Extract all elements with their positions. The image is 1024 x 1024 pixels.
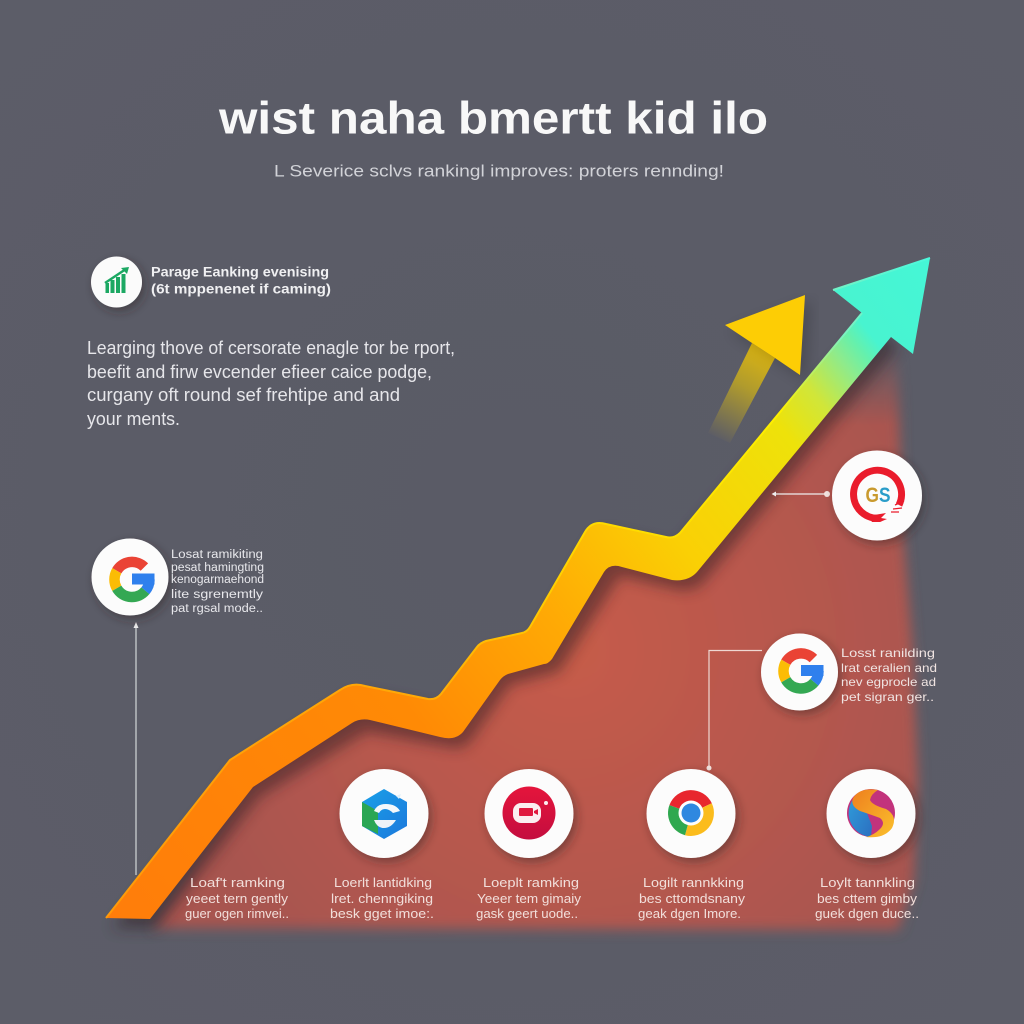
label: column three: Loeplt ramking [483, 875, 579, 890]
label: column one: guer ogen rimvei.. [185, 906, 289, 921]
subtitle: L Severice sclvs rankingl improves: proters rennding! [274, 162, 724, 180]
bottom labels [185, 875, 919, 921]
label: column one: Loaf't ramking [190, 875, 285, 890]
text block: right Google label [841, 646, 937, 704]
icon: chrome badge [646, 769, 736, 858]
text block: intro paragraph: curgany oft round sef frehtipe and and [87, 385, 400, 405]
title: wist naha bmertt kid ilo [218, 92, 768, 144]
icon: left Google badge [92, 538, 168, 616]
label: column four [638, 875, 746, 921]
text block: intro paragraph: Learging thove of cersorate enagle tor be rport, [87, 338, 455, 358]
text block: left Google label: Losat ramikiting [171, 549, 263, 561]
label: column two: Loerlt lantidking [334, 875, 432, 890]
connector: left rising line [134, 622, 138, 875]
header callout heading: Parage Eanking evenising [151, 264, 329, 280]
icon: hexagon badge [340, 769, 428, 858]
label: column one [185, 875, 289, 921]
label: column five: bes cttem gimby [817, 891, 918, 906]
icon: swirl badge [826, 769, 916, 858]
header callout heading: (6t mppenenet if caming) [151, 282, 331, 296]
header callout heading [151, 264, 331, 296]
text block: intro paragraph: beefit and firw evcender efieer caice podge, [87, 362, 432, 382]
connector: right G badge to chrome [706, 650, 762, 770]
text block: left Google label: lite sgrenemtly [171, 589, 263, 601]
text block: left Google label: pesat hamingting [171, 562, 264, 574]
text block: right Google label: Losst ranilding [841, 646, 935, 660]
text block: intro paragraph: your ments. [87, 409, 180, 429]
text block: right Google label: pet sigran ger.. [841, 690, 934, 704]
text block: intro paragraph [87, 338, 455, 429]
label: column four: Logilt rannkking [643, 875, 744, 890]
text block: right Google label: nev egprocle ad [841, 675, 936, 689]
area under the growth line [152, 330, 918, 930]
connector: GS badge [772, 491, 830, 497]
icon: red video badge [484, 769, 574, 858]
label: column five: guek dgen duce.. [815, 906, 919, 921]
label: column five [815, 875, 919, 921]
icon: GS badge [832, 450, 922, 540]
label: column two: lret. chenngiking [331, 891, 433, 906]
icon: right Google badge [761, 634, 838, 710]
ribbon shadow [113, 323, 898, 929]
infographic canvas [87, 100, 936, 938]
main growth arrow [106, 258, 930, 919]
secondary yellow arrow [708, 295, 811, 443]
text block: left Google label: pat rgsal mode.. [171, 603, 263, 615]
icon: growth chart badge [91, 256, 142, 308]
text block: left Google label [171, 549, 264, 615]
label: column two: besk gget imoe:. [330, 906, 434, 921]
label: column three [476, 875, 582, 921]
label: column three: gask geert uode.. [476, 906, 578, 921]
text block: left Google label: kenogarmaehond [171, 574, 264, 586]
label: column three: Yeeer tem gimaiy [477, 891, 582, 906]
label: column four: bes cttomdsnany [639, 891, 746, 906]
text block: right Google label: lrat ceralien and [841, 661, 937, 675]
icon: GS badge: GS [866, 484, 890, 507]
label: column five: Loylt tannkling [820, 875, 915, 890]
label: column two [330, 875, 434, 921]
label: column one: yeeet tern gently [186, 891, 289, 906]
panel: header callout [91, 256, 331, 308]
label: column four: geak dgen Imore. [638, 906, 741, 921]
ribbon top highlight [106, 258, 930, 918]
